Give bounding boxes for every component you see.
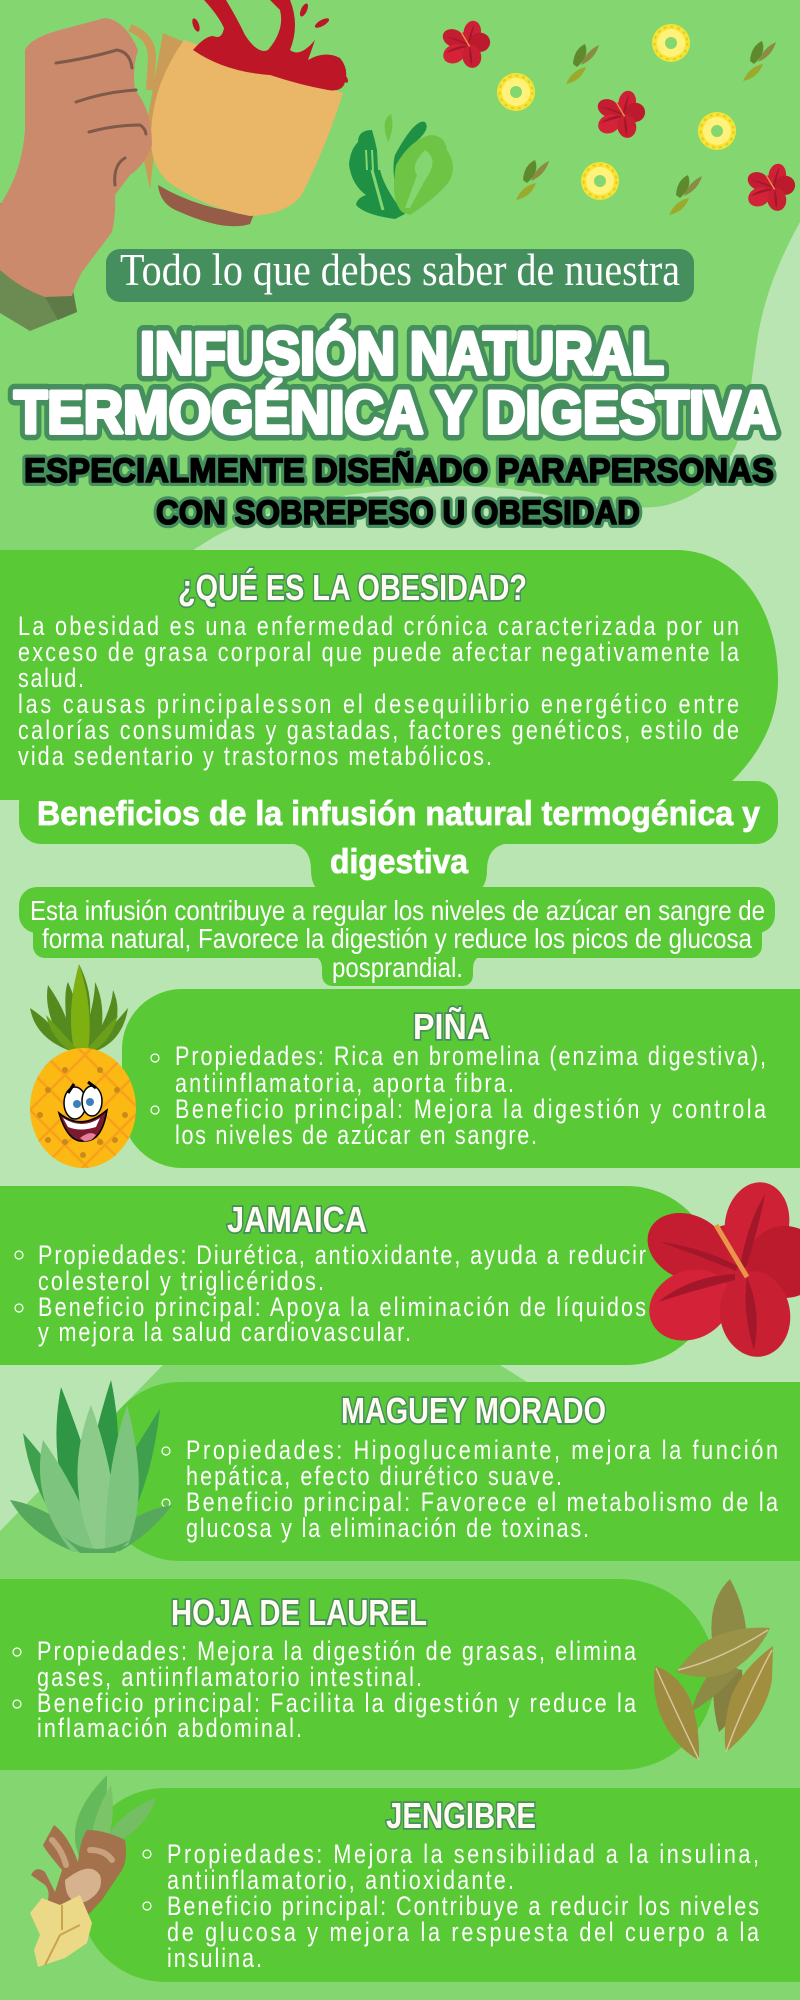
icon: maguey plant — [10, 1380, 172, 1553]
text: piña properties — [151, 1042, 766, 1151]
heading: jamaica: JAMAICA — [227, 1199, 367, 1240]
text: obesity definition: exceso de grasa corporal que puede afectar negativamente la — [18, 638, 739, 668]
text: laurel properties: inflamación abdominal. — [37, 1714, 302, 1744]
target audience subtitle: ESPECIALMENTE DISEÑADO PARAPERSONAS — [24, 452, 774, 490]
heading: what is obesity: ¿QUÉ ES LA OBESIDAD? — [178, 567, 527, 608]
panel: benefits heading — [19, 781, 778, 892]
text: jamaica properties — [15, 1241, 646, 1348]
heading: hoja de laurel: HOJA DE LAUREL — [171, 1592, 427, 1633]
text: obesity definition — [18, 612, 739, 772]
subtitle pill: Todo lo que debes saber de nuestra — [120, 245, 680, 295]
panel: benefits heading: digestiva — [330, 843, 469, 881]
icon: hibiscus flower — [636, 1177, 800, 1362]
title — [14, 320, 776, 446]
text: obesity definition: salud. — [18, 664, 84, 694]
text: jengibre properties: antiinflamatorio, antioxidante. — [167, 1866, 514, 1896]
text: maguey properties: Propiedades: Hipoglucemiante, mejora la función — [186, 1436, 778, 1466]
text: jengibre properties: insulina. — [167, 1944, 262, 1974]
text: jengibre properties — [143, 1840, 759, 1974]
text: obesity definition: calorías consumidas y gastadas, factores genéticos, estilo de — [18, 716, 739, 746]
icons: scattered leaves — [516, 41, 776, 215]
title: INFUSIÓN NATURAL — [140, 320, 664, 387]
panel: what is obesity — [0, 550, 778, 800]
panel: jamaica — [0, 1186, 715, 1365]
icons: scattered hibiscus flowers — [440, 19, 795, 212]
target audience subtitle: CON SOBREPESO U OBESIDAD — [156, 494, 640, 532]
panel: maguey morado — [100, 1382, 800, 1561]
icon: pineapple mascot — [30, 964, 136, 1168]
panel: hoja de laurel — [0, 1579, 715, 1770]
text: piña properties: Beneficio principal: Mejora la digestión y controla — [175, 1095, 766, 1125]
text: piña properties: antiinflamatoria, aporta fibra. — [175, 1069, 514, 1099]
text: obesity definition: La obesidad es una enfermedad crónica caracterizada por un — [18, 612, 739, 642]
illustration: hand holding mug with splash — [0, 0, 350, 331]
target audience subtitle — [24, 452, 774, 532]
text: maguey properties: glucosa y la eliminación de toxinas. — [186, 1514, 589, 1544]
text: maguey properties: Beneficio principal: Favorece el metabolismo de la — [186, 1488, 778, 1518]
text: jamaica properties: y mejora la salud cardiovascular. — [38, 1318, 411, 1348]
text: obesity definition: vida sedentario y trastornos metabólicos. — [18, 742, 492, 772]
text: piña properties: Propiedades: Rica en bromelina (enzima digestiva), — [175, 1042, 766, 1072]
text: laurel properties: gases, antiinflamatorio intestinal. — [37, 1663, 422, 1693]
text: obesity definition: las causas principalesson el desequilibrio energético entre — [18, 690, 739, 720]
text: jamaica properties: Beneficio principal: Apoya la eliminación de líquidos — [38, 1293, 646, 1323]
text: jengibre properties: Beneficio principal: Contribuye a reducir los niveles — [167, 1892, 759, 1922]
heading: piña: PIÑA — [413, 1005, 490, 1047]
text: jamaica properties: colesterol y triglicéridos. — [38, 1267, 324, 1297]
text: jengibre properties: Propiedades: Mejora la sensibilidad a la insulina, — [167, 1840, 759, 1870]
target audience subtitle: CON SOBREPESO U OBESIDAD — [156, 494, 640, 532]
icon: ginger root — [30, 1775, 156, 1967]
panel: jengibre — [80, 1788, 800, 1982]
target audience subtitle: ESPECIALMENTE DISEÑADO PARAPERSONAS — [24, 452, 774, 490]
title: INFUSIÓN NATURAL — [140, 320, 664, 387]
heading: jengibre: JENGIBRE — [386, 1795, 536, 1836]
text: jamaica properties: Propiedades: Diurética, antioxidante, ayuda a reducir — [38, 1241, 646, 1271]
panel: benefits heading: Beneficios de la infusión natural termogénica y — [37, 795, 760, 833]
icons: scattered pineapple rings — [497, 24, 736, 200]
panel: infusion description — [19, 887, 775, 986]
icon: green leaf logo with fork and spoon — [349, 114, 453, 219]
text: maguey properties: hepática, efecto diurético suave. — [186, 1462, 562, 1492]
text: maguey properties — [162, 1436, 778, 1544]
text: laurel properties — [13, 1637, 636, 1744]
text: piña properties: los niveles de azúcar en sangre. — [175, 1121, 537, 1151]
heading: maguey morado: MAGUEY MORADO — [341, 1390, 606, 1431]
text: jengibre properties: de glucosa y mejora la respuesta del cuerpo a la — [167, 1918, 759, 1948]
text: laurel properties: Propiedades: Mejora la digestión de grasas, elimina — [37, 1637, 636, 1667]
panel: infusion description: posprandial. — [332, 952, 463, 983]
panel: piña — [122, 989, 800, 1168]
text: laurel properties: Beneficio principal: Facilita la digestión y reduce la — [37, 1689, 636, 1719]
icon: bay leaves — [654, 1579, 773, 1760]
